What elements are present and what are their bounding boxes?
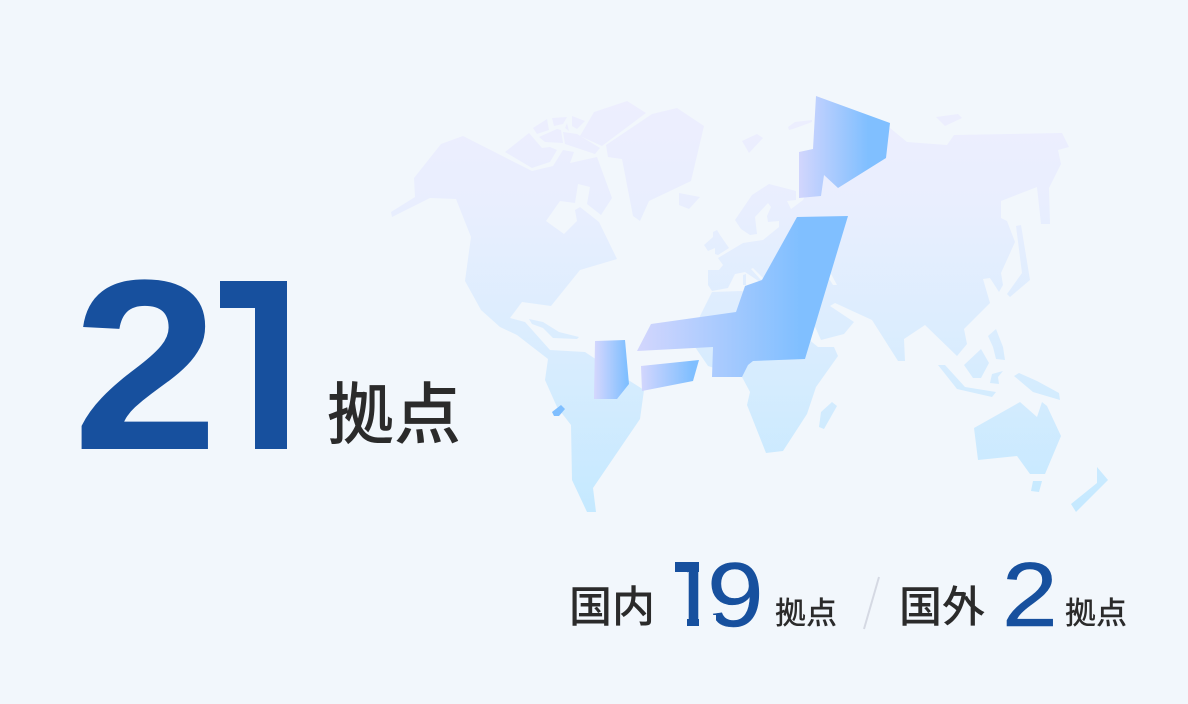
Franz Josef Land xyxy=(788,120,812,130)
Philippines xyxy=(988,329,1005,360)
Madagascar xyxy=(819,402,837,429)
total count: 21: 2 xyxy=(72,229,218,501)
New Zealand xyxy=(1071,467,1108,512)
Honshu xyxy=(637,216,848,377)
Hokkaido xyxy=(799,96,890,198)
domestic label: 国内 xyxy=(569,584,655,632)
Novaya Zemlya xyxy=(936,114,962,126)
New Guinea xyxy=(1014,373,1060,400)
inland seas xyxy=(751,268,837,285)
domestic unit: 拠点 xyxy=(775,596,837,631)
Sakhalin xyxy=(1007,225,1030,297)
Britain xyxy=(704,230,729,255)
Africa xyxy=(695,291,838,453)
Svalbard xyxy=(742,134,763,153)
Iceland xyxy=(679,193,700,209)
Sulawesi xyxy=(990,371,1003,384)
Italy xyxy=(743,274,746,285)
Tasmania xyxy=(1031,481,1042,492)
Central America islands xyxy=(529,319,579,339)
Eurasia xyxy=(708,128,1069,361)
Kyushu xyxy=(594,340,629,399)
overseas label: 国外 xyxy=(899,584,985,632)
total count: 21 xyxy=(82,279,287,449)
total unit label: 拠点 xyxy=(327,378,461,453)
domestic number xyxy=(675,562,760,628)
Sumatra and Java xyxy=(938,365,996,397)
overseas count xyxy=(899,544,1127,646)
Okinawa xyxy=(552,405,565,416)
Borneo xyxy=(964,349,989,378)
overseas unit: 拠点 xyxy=(1065,596,1127,631)
Greenland xyxy=(606,108,704,221)
domestic number: 1 xyxy=(663,545,720,646)
domestic count xyxy=(572,562,836,628)
Australia xyxy=(974,402,1061,474)
domestic number: 9 xyxy=(707,545,764,646)
world map xyxy=(391,101,1108,512)
total count: 21: 1 xyxy=(192,229,338,501)
overseas number: 2 xyxy=(1002,544,1058,646)
the Americas xyxy=(391,136,644,512)
Japan regions highlighted xyxy=(552,96,890,416)
arctic islands xyxy=(505,101,646,168)
separator slash xyxy=(864,577,879,629)
Shikoku xyxy=(641,360,699,391)
